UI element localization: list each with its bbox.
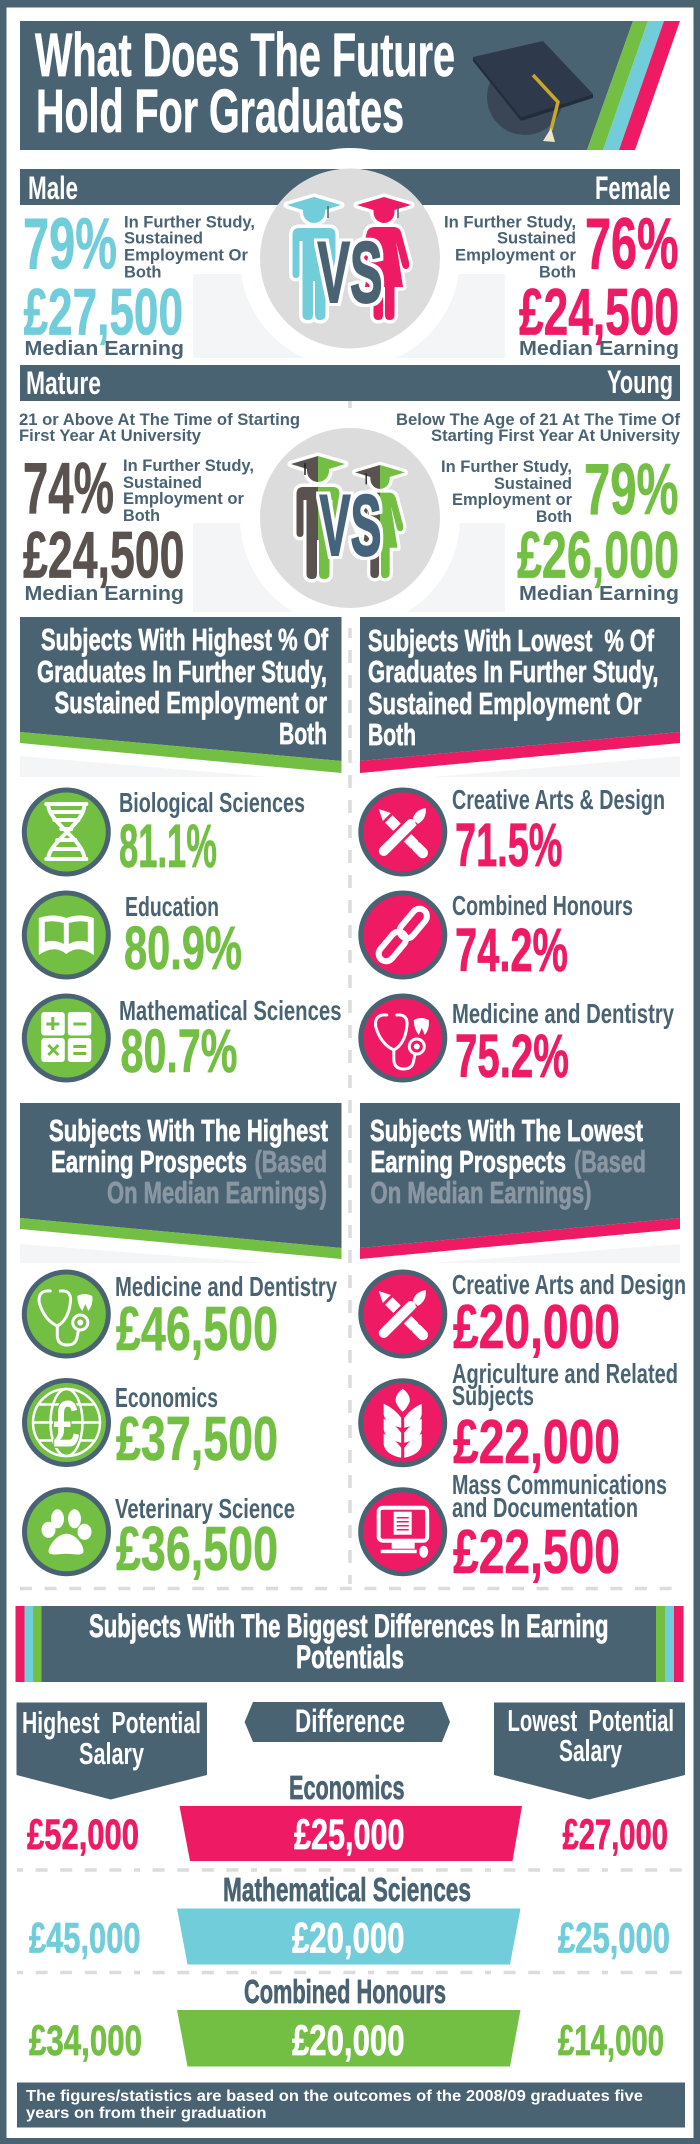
item: mathematical sciences [119, 995, 342, 1085]
item: veterinary science earnings [115, 1493, 295, 1584]
item: economics earnings [115, 1382, 278, 1474]
female statistics: Sustained [497, 230, 576, 248]
heading: highest earning prospects: Subjects With The Highest [49, 1113, 328, 1148]
row: combined honours [29, 1973, 664, 2066]
accent stripes [587, 21, 680, 150]
mature definition: First Year At University [19, 426, 202, 445]
item: biological sciences [119, 787, 305, 880]
mature definition [19, 410, 300, 445]
title text: Hold For Graduates [36, 77, 404, 145]
footer note: The figures/statistics are based on the outcomes of the 2008/09 graduates five [26, 2088, 643, 2105]
icon: book [24, 893, 108, 977]
heading: lowest percentage subjects: Both [368, 717, 416, 752]
row: mathematical sciences: £20,000 [292, 1914, 404, 1962]
heading: highest percentage subjects [20, 617, 342, 777]
column header: lowest potential salary: Salary [559, 1733, 623, 1768]
icon: dna [24, 790, 108, 874]
icon: male graduate figure [287, 197, 341, 320]
item: creative arts and design: 71.5% [455, 811, 562, 879]
icon: female graduate figure [357, 197, 411, 320]
icon: calculator [24, 996, 108, 1080]
mature statistics [23, 449, 254, 605]
young definition: Starting First Year At University [431, 426, 681, 445]
mature statistics: £24,500 [23, 518, 184, 592]
young statistics: Sustained [494, 475, 572, 493]
versus label: VS [318, 225, 382, 321]
male statistics: £27,500 [24, 274, 183, 348]
item: biological sciences: Biological Sciences [119, 787, 305, 818]
item: combined honours: 74.2% [455, 916, 568, 984]
item: veterinary science earnings: Veterinary Science [115, 1493, 295, 1524]
heading: highest percentage subjects: Subjects With Highest % Of [41, 622, 328, 657]
heading: highest earning prospects: (Based [254, 1144, 327, 1179]
icon: art tools [361, 1272, 445, 1356]
item: veterinary science earnings: £36,500 [116, 1515, 278, 1584]
row: mathematical sciences [29, 1871, 670, 1964]
row: economics: Economics [289, 1769, 404, 1806]
male female header bar [20, 169, 680, 206]
mature statistics: Median Earning [24, 583, 184, 605]
icon: stethoscope [361, 996, 445, 1080]
heading: highest earning prospects: Earning Prospects [51, 1144, 247, 1179]
column header: highest potential salary: Highest Potential [22, 1705, 201, 1740]
female statistics: Both [539, 264, 576, 282]
mature statistics: Both [123, 507, 160, 525]
item: agriculture earnings: £22,000 [453, 1408, 620, 1477]
section divider [20, 1587, 680, 1590]
male female header bar: Male [28, 170, 78, 206]
male statistics: 79% [23, 204, 117, 284]
male statistics: Sustained [124, 230, 203, 248]
heading: highest percentage subjects: Graduates In Further Study, [37, 654, 327, 689]
mature statistics: Sustained [123, 474, 202, 492]
mature young header bar: Mature [26, 365, 101, 401]
young statistics: Median Earning [519, 583, 679, 605]
centre dashed divider [348, 350, 352, 1584]
young statistics [441, 450, 679, 605]
footer note: years on from their graduation [26, 2105, 266, 2122]
young definition [396, 410, 681, 445]
heading: biggest differences: Potentials [296, 1639, 404, 1675]
icon: stethoscope [24, 1272, 108, 1356]
young statistics: Employment or [452, 491, 573, 509]
male statistics: Employment Or [124, 246, 249, 264]
row: economics: £25,000 [294, 1811, 404, 1859]
column header: difference [245, 1702, 450, 1742]
item: mass communications earnings: £22,500 [453, 1518, 620, 1587]
row: combined honours: £20,000 [292, 2017, 404, 2065]
item: combined honours [452, 890, 633, 984]
title text [35, 21, 455, 145]
mature statistics: Employment or [123, 490, 245, 508]
item: biological sciences: 81.1% [119, 812, 217, 880]
item: medicine and dentistry earnings: £46,500 [116, 1295, 278, 1364]
icon: art tools [361, 790, 445, 874]
icon: young graduate figure [355, 465, 405, 578]
mature statistics: 74% [23, 449, 114, 529]
item: medicine and dentistry earnings: Medicine and Dentistry [115, 1271, 337, 1302]
row: economics [27, 1769, 668, 1861]
mature statistics: In Further Study, [123, 457, 254, 475]
column header: highest potential salary [16, 1702, 207, 1800]
item: education: Education [125, 891, 219, 922]
icon: graduation cap [473, 41, 593, 142]
heading: lowest earning prospects [360, 1103, 680, 1263]
mature young header bar [20, 364, 680, 401]
female statistics: Median Earning [519, 338, 679, 360]
heading: lowest earning prospects: On Median Earnings) [370, 1175, 592, 1210]
heading: lowest percentage subjects [360, 617, 680, 777]
female statistics: Employment or [455, 246, 577, 264]
male statistics [23, 204, 255, 360]
title banner [20, 21, 680, 150]
versus label: VS [320, 478, 382, 574]
icon: wheat [361, 1381, 445, 1465]
heading: lowest earning prospects: Earning Prospects [370, 1144, 566, 1179]
row: combined honours: £34,000 [29, 2017, 142, 2065]
young statistics: In Further Study, [441, 458, 572, 476]
footer note [17, 2082, 685, 2128]
item: mass communications earnings [452, 1469, 667, 1587]
icon: chain link [361, 893, 445, 977]
item: mathematical sciences: 80.7% [120, 1017, 238, 1085]
item: medicine and dentistry: 75.2% [455, 1022, 569, 1090]
item: creative arts and design [452, 784, 665, 879]
young definition: Below The Age of 21 At The Time Of [396, 410, 680, 429]
item: mathematical sciences: Mathematical Sciences [119, 995, 342, 1026]
item: education: 80.9% [124, 914, 242, 982]
panel: male vs female [20, 148, 680, 368]
heading: highest percentage subjects: Both [279, 716, 327, 751]
heading: biggest differences [16, 1606, 684, 1682]
icon: globe with pound [24, 1380, 108, 1464]
row: mathematical sciences: £45,000 [29, 1914, 140, 1962]
item: economics earnings: £37,500 [116, 1405, 278, 1474]
item: education [124, 891, 242, 982]
female statistics [444, 204, 679, 360]
row: economics: £52,000 [27, 1811, 139, 1859]
icon: globe with pound: £ [54, 1386, 80, 1460]
female statistics: In Further Study, [444, 214, 576, 232]
heading: lowest earning prospects: (Based [574, 1144, 646, 1179]
heading: highest percentage subjects: Sustained Employment or [54, 685, 327, 720]
item: creative arts and design earnings: £20,000 [453, 1293, 620, 1362]
row: combined honours: Combined Honours [244, 1973, 446, 2010]
icon: paw print [24, 1490, 108, 1574]
male statistics: Median Earning [24, 338, 184, 360]
male statistics: Both [124, 264, 162, 282]
item: agriculture earnings: Subjects [452, 1380, 534, 1411]
young statistics: Both [536, 508, 572, 526]
item: agriculture earnings [452, 1358, 678, 1477]
male statistics: In Further Study, [124, 214, 255, 232]
column header: difference: Difference [295, 1703, 405, 1739]
heading: highest earning prospects: On Median Earnings) [107, 1175, 327, 1210]
column header: highest potential salary: Salary [79, 1736, 145, 1771]
title text: What Does The Future [35, 21, 455, 89]
icon: computer [361, 1490, 445, 1574]
icon: mature graduate figure [291, 456, 345, 579]
mature definition: 21 or Above At The Time of Starting [19, 410, 300, 429]
row: mathematical sciences: Mathematical Sciences [223, 1871, 471, 1908]
panel: mature vs young [19, 364, 681, 628]
column header: lowest potential salary [494, 1702, 685, 1800]
heading: highest earning prospects [20, 1103, 342, 1263]
item: medicine and dentistry [452, 998, 674, 1090]
item: economics earnings: Economics [115, 1382, 218, 1413]
